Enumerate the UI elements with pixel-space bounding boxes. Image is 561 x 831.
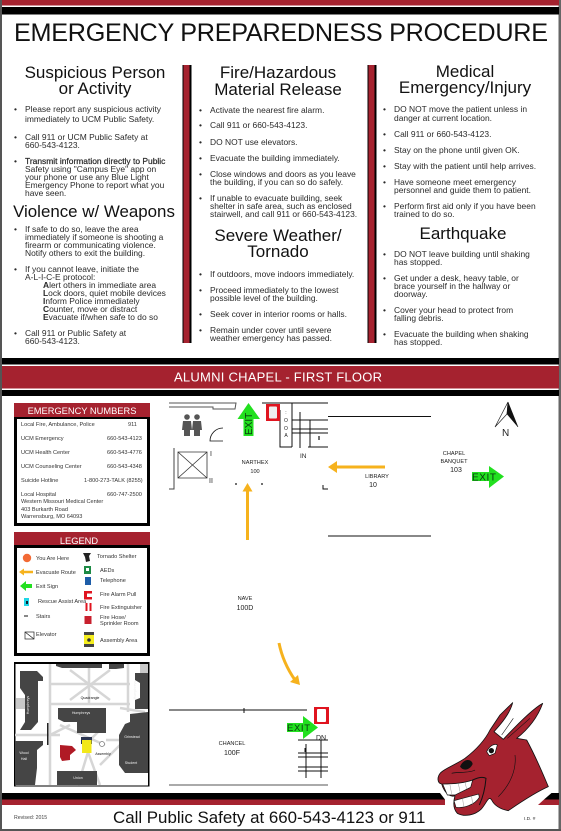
legend item: elevator: Elevator (36, 632, 57, 638)
legend item: sprinkler room: Fire Hose/ (100, 615, 126, 621)
suspicious person bullets: 660-543-4123. (25, 140, 80, 150)
earthquake bullets: falling debris. (394, 313, 444, 323)
legend item: telephone: Telephone (100, 578, 126, 584)
room labels upper: NARTHEX (242, 460, 269, 466)
earthquake bullets: Evacuate the building when shaking (394, 329, 529, 339)
room labels upper: O (284, 426, 288, 432)
violence bullets: A-L-I-C-E protocol: (25, 272, 95, 282)
room label: chancel (219, 735, 326, 757)
medical bullets: Have someone meet emergency (394, 177, 517, 187)
earthquake bullets: Cover your head to protect from (394, 305, 513, 315)
icon: north arrow: N (502, 428, 509, 439)
violence bullets (14, 224, 166, 346)
icon: restrooms (182, 414, 202, 436)
fire bullets: • (199, 169, 202, 179)
fire bullets: stairwell, and call 911 or 660-543-4123. (210, 209, 357, 219)
fire bullets: Activate the nearest fire alarm. (210, 105, 324, 115)
room labels upper: LIBRARY (365, 474, 389, 480)
suspicious person bullets: Please report any suspicious activity (25, 104, 162, 114)
earthquake bullets: • (383, 305, 386, 315)
fire bullets: DO NOT use elevators. (210, 137, 298, 147)
severe weather bullets: possible level of the building. (210, 293, 318, 303)
fire bullets (199, 105, 357, 219)
fire bullets: • (199, 120, 202, 130)
room labels upper: II (209, 478, 213, 485)
legend item: assembly area: Assembly Area (100, 638, 138, 644)
medical bullets: • (383, 129, 386, 139)
severe weather bullets: weather emergency has passed. (209, 333, 332, 343)
phone number list: 403 Burkarth Road (21, 507, 68, 513)
campus map: Assembly (95, 752, 111, 756)
earthquake bullets: brace yourself in the hallway or (394, 281, 510, 291)
legend item: AED: AEDs (100, 568, 115, 574)
medical bullets: Stay on the phone until given OK. (394, 145, 520, 155)
earthquake bullets: Get under a desk, heavy table, or (394, 273, 519, 283)
fire bullets: • (199, 193, 202, 203)
phone number list: UCM Health Center (21, 450, 70, 456)
phone number list: Local Hospital (21, 492, 56, 498)
phone number list: Local Fire, Ambulance, Police (21, 422, 95, 428)
suspicious person bullets: immediately to UCM Public Safety. (25, 114, 154, 124)
room labels upper (209, 410, 468, 612)
violence bullets: Inform Police immediately (43, 296, 140, 306)
floor plan walls: upper (169, 403, 431, 536)
heading: medical (399, 62, 532, 97)
room labels upper: IN (300, 453, 307, 460)
violence bullets: Counter, move or distract (43, 304, 138, 314)
icon: extinguisher cabinet south (314, 707, 329, 724)
floor banner (2, 358, 559, 396)
legend item: fire alarm: Fire Alarm Pull (100, 592, 136, 598)
earthquake bullets: • (383, 273, 386, 283)
fire bullets: the building, if you can so do safely. (210, 177, 343, 187)
medical bullets: trained to do so. (394, 209, 455, 219)
exit arrow: east (472, 466, 504, 488)
campus map (14, 662, 150, 786)
violence bullets: immediately if someone is shooting a (25, 232, 164, 242)
violence bullets: Lock doors, quiet mobile devices (43, 288, 166, 298)
medical bullets: DO NOT move the patient unless in (394, 104, 527, 114)
heading: severe weather: Severe Weather/ (214, 226, 342, 245)
room labels upper: 10 (369, 482, 377, 489)
medical bullets: • (383, 161, 386, 171)
suspicious person bullets: • (14, 104, 17, 114)
medical bullets: Call 911 or 660-543-4123. (394, 129, 491, 139)
icon: fire extinguisher cabinet (266, 404, 280, 421)
footer: id: I.D. # (524, 816, 536, 822)
fire bullets: Call 911 or 660-543-4123. (210, 120, 307, 130)
fire bullets: • (199, 153, 202, 163)
room label: chancel: 100F (224, 750, 240, 757)
medical bullets: • (383, 201, 386, 211)
suspicious person bullets: • (14, 132, 17, 142)
phone number list: 911 (128, 422, 137, 428)
legend item: you are here: You Are Here (36, 556, 69, 562)
fire bullets: Evacuate the building immediately. (210, 153, 340, 163)
medical bullets (383, 104, 536, 219)
legend item: rescue area: Rescue Assist Area (38, 599, 87, 605)
campus map: Grinstead (124, 735, 140, 739)
phone number list: UCM Counseling Center (21, 464, 82, 470)
medical bullets: danger at current location. (394, 113, 492, 123)
severe weather bullets: Seek cover in interior rooms or halls. (210, 309, 347, 319)
campus map: Hall (21, 757, 27, 761)
heading: suspicious person: Suspicious Person (25, 63, 165, 82)
phone number list (21, 422, 143, 520)
panel: suspicious person (14, 63, 165, 198)
heading: violence: Violence w/ Weapons (13, 202, 175, 221)
legend item: tornado shelter: Tornado Shelter (97, 554, 137, 560)
campus map: Quadrangle (81, 696, 99, 700)
severe weather bullets: • (199, 325, 202, 335)
violence bullets: Alert others in immediate area (43, 280, 156, 290)
icon: north arrow (495, 402, 518, 439)
fire bullets: • (199, 105, 202, 115)
footer band (2, 793, 559, 805)
footer: call public safety: Call Public Safety at 660-543-4123 or 911 (113, 808, 425, 827)
severe weather bullets: Proceed immediately to the lowest (210, 285, 339, 295)
room labels upper: I (210, 451, 212, 458)
fire bullets: shelter in safe area, such as enclosed (210, 201, 352, 211)
violence bullets: Call 911 or Public Safety at (25, 328, 127, 338)
earthquake bullets (383, 249, 530, 347)
heading: fire: Fire/Hazardous (220, 63, 336, 82)
panel: medical (383, 62, 536, 219)
campus map: Humphreys (26, 696, 30, 714)
mascot: mule head (438, 703, 548, 815)
exit arrow: north door (238, 403, 260, 436)
earthquake bullets: • (383, 249, 386, 259)
column divider right (368, 65, 376, 343)
earthquake bullets: has stopped. (394, 337, 442, 347)
campus map: Union (73, 776, 83, 780)
exit arrow: north door: EXIT (244, 413, 255, 435)
fire bullets: Close windows and doors as you leave (210, 169, 356, 179)
phone number list: Warrensburg, MO 64093 (21, 514, 82, 520)
earthquake bullets: has stopped. (394, 257, 442, 267)
campus map: Student (125, 761, 137, 765)
floor plan walls: chancel (169, 708, 328, 785)
severe weather bullets: Remain under cover until severe (210, 325, 332, 335)
campus map: Wood (19, 751, 29, 755)
violence bullets: 660-543-4123. (25, 336, 80, 346)
violence bullets: If you cannot leave, initiate the (25, 264, 139, 274)
title: EMERGENCY PREPAREDNESS PROCEDURE (14, 19, 548, 47)
evacuation arrow: from library (328, 461, 385, 473)
medical bullets: Perform first aid only if you have been (394, 201, 536, 211)
phone number list: 1-800-273-TALK (8255) (84, 478, 143, 484)
evacuation arrow: curved (279, 643, 300, 685)
heading: medical: Emergency/Injury (399, 78, 532, 97)
suspicious person bullets: • (14, 156, 17, 166)
suspicious person bullets (14, 104, 165, 198)
legend item: sprinkler room: Sprinkler Room (100, 621, 139, 627)
panel: fire (199, 63, 357, 219)
panel: earthquake (383, 224, 530, 347)
exit arrow: south: EXIT (287, 723, 310, 734)
room label: chancel: CHANCEL (219, 741, 245, 747)
room labels upper: : (285, 410, 287, 416)
footer: revised date: Revised: 2015 (14, 815, 47, 821)
phone number list: 660-543-4348 (107, 464, 142, 470)
suspicious person bullets: your phone or use any Blue Light (25, 172, 149, 182)
violence bullets: Notify others to exit the building. (25, 248, 145, 258)
suspicious person bullets: Safety using "Campus Eye" app on (25, 164, 157, 174)
severe weather bullets: • (199, 285, 202, 295)
panel: emergency numbers (14, 403, 150, 526)
room labels upper: 100D (237, 605, 253, 612)
suspicious person bullets: have seen. (25, 188, 66, 198)
legend item: fire extinguisher: Fire Extinguisher (100, 605, 142, 611)
violence bullets: • (14, 224, 17, 234)
panel: violence with weapons (13, 202, 175, 346)
campus map: Humphreys (133, 681, 137, 699)
severe weather bullets: If outdoors, move indoors immediately. (210, 269, 354, 279)
floor banner: ALUMNI CHAPEL - FIRST FLOOR (174, 370, 382, 384)
violence bullets: • (14, 328, 17, 338)
room labels upper: 103 (450, 467, 462, 474)
severe weather bullets: • (199, 309, 202, 319)
violence bullets: If safe to do so, leave the area (25, 224, 139, 234)
exit arrow: east: EXIT (472, 472, 496, 484)
severe weather bullets (199, 269, 354, 343)
legend item: evacuation route: Evacuate Route (36, 570, 76, 576)
campus map: Humphreys (72, 711, 90, 715)
panel: legend (14, 532, 150, 656)
room labels upper: A (284, 433, 288, 439)
room label: chancel: DN (316, 735, 326, 742)
panel: severe weather (199, 226, 354, 343)
room labels upper: NAVE (238, 596, 253, 602)
evacuation arrow: from nave (242, 483, 252, 540)
medical bullets: Stay with the patient until help arrives. (394, 161, 536, 171)
room labels upper: CHAPEL (443, 451, 465, 457)
fire bullets: If unable to evacuate building, seek (210, 193, 343, 203)
heading: fire: Material Release (214, 80, 342, 99)
medical bullets: personnel and guide them to patient. (394, 185, 531, 195)
heading: medical: Medical (436, 62, 494, 81)
heading: fire (214, 63, 342, 99)
earthquake bullets: doorway. (394, 289, 428, 299)
suspicious person bullets: Call 911 or UCM Public Safety at (25, 132, 148, 142)
heading: suspicious person: or Activity (59, 79, 132, 98)
room labels upper: O (284, 418, 288, 424)
phone number list: Western Missouri Medical Center (21, 499, 103, 505)
phone number list: UCM Emergency (21, 436, 64, 442)
phone number list: 660-747-2500 (107, 492, 142, 498)
top header bands (2, 0, 559, 14)
earthquake bullets: DO NOT leave building until shaking (394, 249, 530, 259)
suspicious person bullets: Transmit information directly to Public (25, 156, 165, 166)
medical bullets: • (383, 177, 386, 187)
heading: severe weather: Tornado (247, 242, 309, 261)
earthquake bullets: • (383, 329, 386, 339)
fire bullets: • (199, 137, 202, 147)
severe weather bullets: • (199, 269, 202, 279)
exit arrow: south (287, 716, 318, 739)
heading: earthquake: Earthquake (420, 224, 506, 243)
room labels upper: 100 (250, 469, 260, 475)
violence bullets: Evacuate if/when safe to do so (43, 312, 158, 322)
violence bullets: • (14, 264, 17, 274)
heading: severe weather (214, 226, 342, 261)
heading: legend: LEGEND (60, 536, 98, 546)
heading: suspicious person (25, 63, 165, 98)
heading: emergency numbers: EMERGENCY NUMBERS (28, 406, 136, 416)
violence bullets: firearm or communicating violence. (25, 240, 156, 250)
legend item: sprinkler room (84, 615, 139, 627)
medical bullets: • (383, 145, 386, 155)
column divider left (182, 65, 192, 343)
legend item: stairs: Stairs (36, 614, 51, 620)
legend item: exit sign: Exit Sign (36, 584, 58, 590)
suspicious person bullets: Emergency Phone to report what you (25, 180, 165, 190)
phone number list: 660-543-4123 (107, 436, 142, 442)
room labels upper: BANQUET (440, 459, 468, 465)
phone number list: Suicide Hotline (21, 478, 58, 484)
medical bullets: • (383, 104, 386, 114)
phone number list: 660-543-4776 (107, 450, 142, 456)
